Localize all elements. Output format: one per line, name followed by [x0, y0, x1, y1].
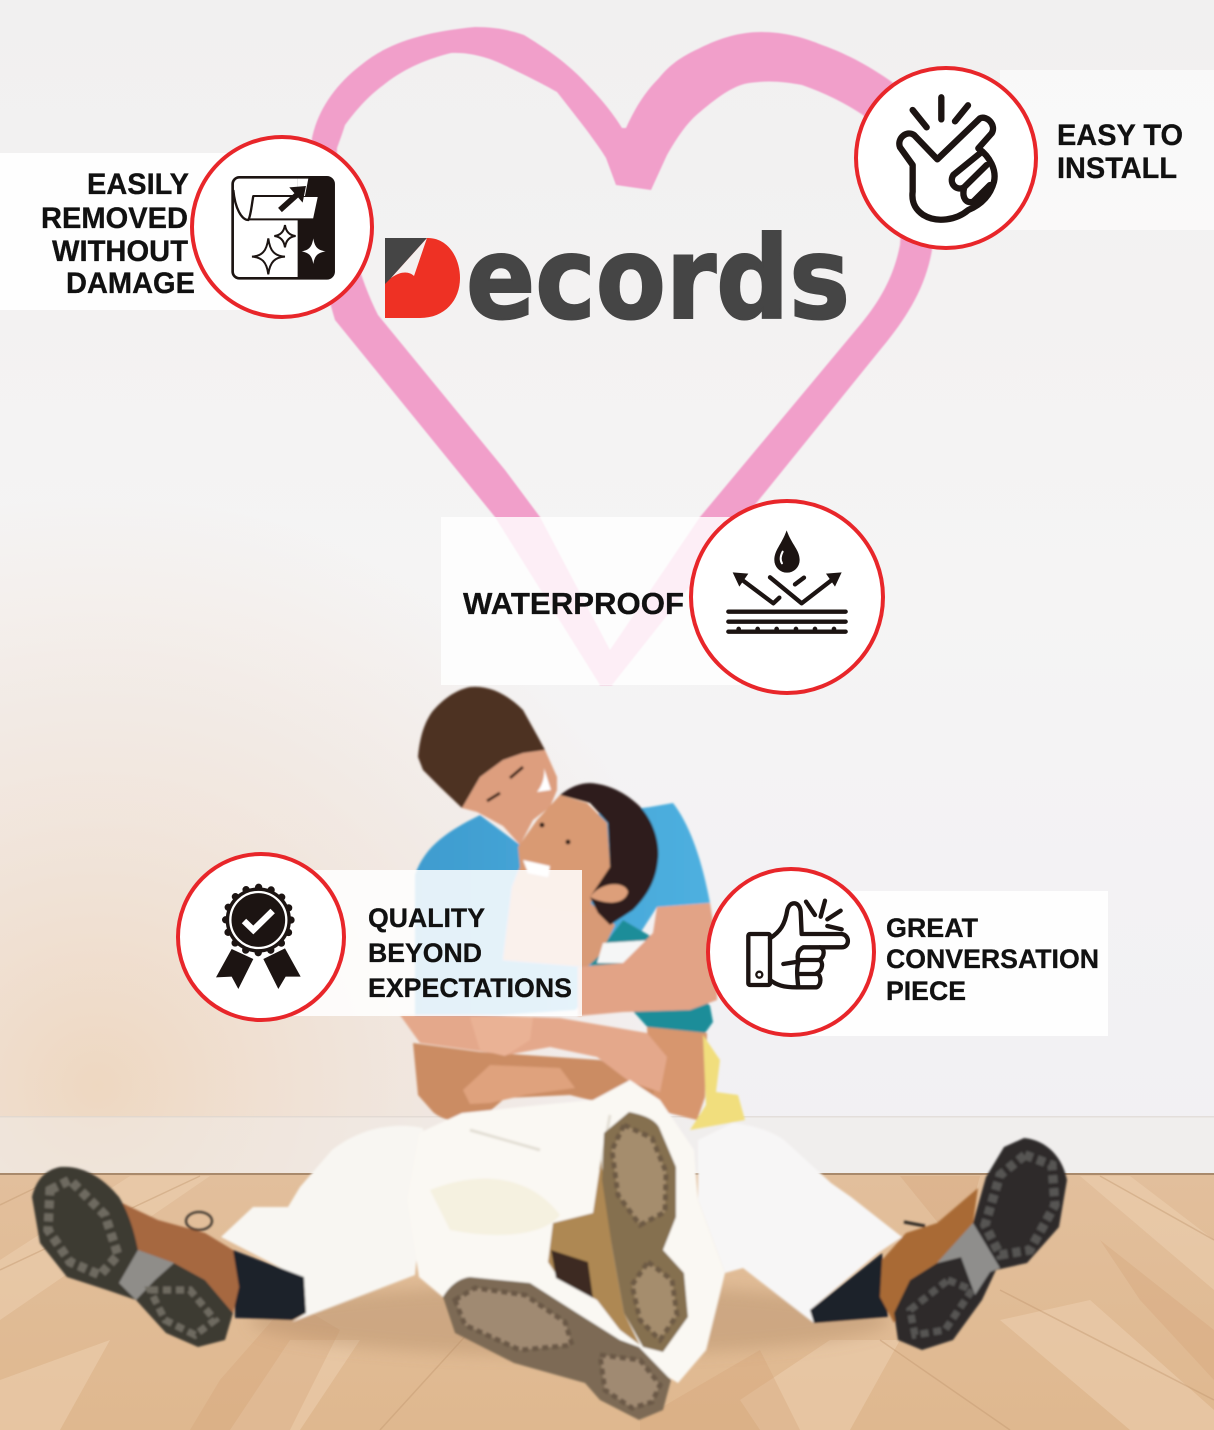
woman's arms	[413, 1027, 707, 1122]
callout panel	[261, 870, 582, 1016]
right jeans cuff	[810, 1253, 888, 1323]
callout: easy to install	[856, 68, 1214, 248]
logo mark: peeled D	[385, 238, 460, 318]
right boot	[880, 1138, 1067, 1350]
icon: thumbs-up pointing hand	[748, 901, 848, 987]
icon: award rosette	[216, 887, 301, 989]
callout panel	[1000, 70, 1214, 230]
callout text: WITHOUT	[52, 235, 188, 268]
icon circle	[708, 869, 874, 1035]
centre flat boot	[443, 1277, 671, 1420]
overalls left leg	[221, 1126, 425, 1322]
pink painted heart	[310, 27, 932, 685]
woman's teal top	[590, 920, 713, 1040]
man's blue shirt	[415, 803, 710, 1015]
centre upright boot	[548, 1112, 688, 1352]
couple sitting on the floor	[32, 687, 1067, 1420]
callout: waterproof	[441, 501, 883, 693]
Decords logo	[385, 212, 850, 345]
icon: peeling sticker with sparkles	[233, 177, 334, 278]
icon circle	[856, 68, 1036, 248]
callout panel	[441, 517, 741, 685]
left boot	[32, 1167, 239, 1347]
callout text	[41, 168, 195, 300]
callout text: PIECE	[886, 976, 966, 1006]
callout text: GREAT	[886, 913, 979, 943]
icon: water drop and layers	[728, 530, 846, 632]
callout text	[368, 903, 572, 1003]
callout panel	[791, 891, 1108, 1036]
callout text: BEYOND	[368, 938, 482, 968]
white overall strap	[597, 940, 653, 963]
callout text	[886, 913, 1099, 1006]
callout text: EXPECTATIONS	[368, 973, 572, 1003]
icon: finger snap	[899, 97, 995, 220]
callout text	[1057, 119, 1183, 185]
left jeans cuff	[233, 1250, 306, 1320]
callout panel	[0, 153, 240, 310]
callout text: WATERPROOF	[463, 586, 684, 621]
man's head	[418, 687, 557, 845]
logo wordmark: ecords	[466, 212, 850, 345]
callout: quality	[178, 854, 582, 1020]
callout text: REMOVED	[41, 202, 188, 235]
callout text: QUALITY	[368, 903, 485, 933]
callout: easily removed	[0, 137, 372, 317]
man's arms and hands	[400, 903, 718, 1092]
icon circle	[691, 501, 883, 693]
woman's head	[503, 783, 658, 967]
callout text: INSTALL	[1057, 152, 1177, 185]
wooden floor	[0, 1173, 1214, 1430]
callout text: EASY TO	[1057, 119, 1183, 152]
floor shadow	[250, 1285, 890, 1355]
callout: conversation piece	[708, 869, 1108, 1036]
woman's overalls	[407, 1080, 725, 1383]
icon circle	[192, 137, 372, 317]
callout text: DAMAGE	[66, 267, 195, 300]
callout text: EASILY	[87, 168, 189, 201]
callout text: CONVERSATION	[886, 944, 1099, 974]
icon circle	[178, 854, 344, 1020]
overalls right leg	[698, 1123, 902, 1323]
yellow paint on overalls	[690, 1035, 745, 1130]
